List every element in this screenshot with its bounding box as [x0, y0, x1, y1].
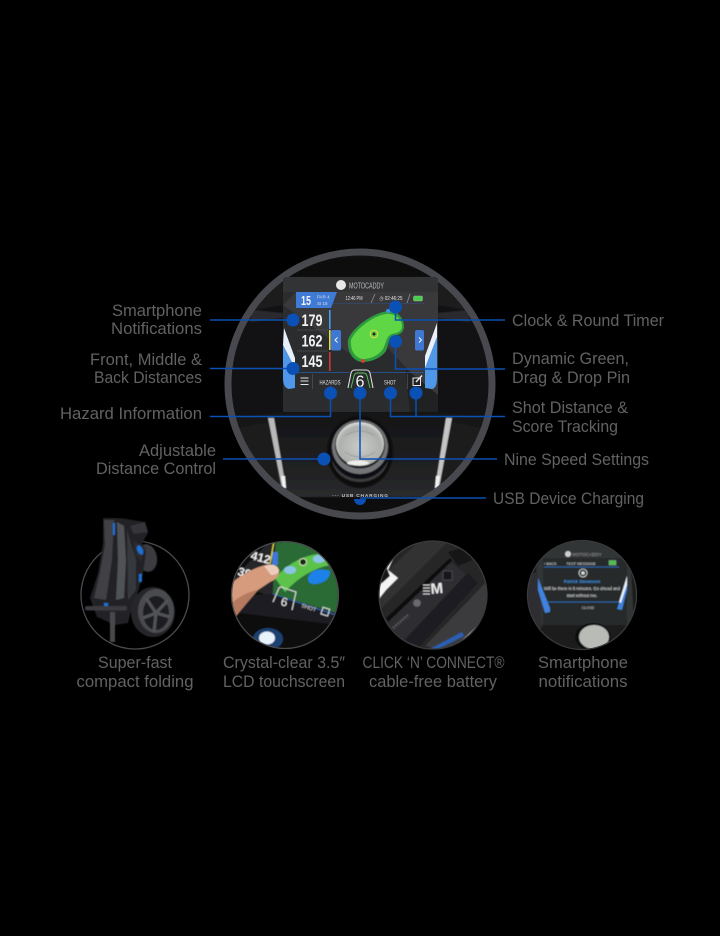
- feature: smartphone notifications: Will be there in 5 minutes. Go ahead and: [544, 586, 621, 591]
- right callout labels: USB Device Charging: [493, 490, 644, 508]
- console body: [267, 417, 453, 498]
- status bar: 12:46 PM: [346, 296, 363, 302]
- USB charging print: ◦◦◦ USB CHARGING: [332, 493, 388, 499]
- display bezel and screen: SI 18: [317, 301, 328, 306]
- left callout labels: Smartphone: [112, 302, 202, 320]
- left callout labels: Distance Control: [96, 460, 216, 478]
- golf green: [348, 309, 404, 363]
- distance numbers: 162: [302, 332, 322, 350]
- bottom menu: HAZARDS: [320, 380, 341, 386]
- feature captions: CLICK ‘N’ CONNECT®: [362, 654, 504, 672]
- feature: click n connect battery: M: [430, 580, 444, 598]
- hole badge: [296, 292, 337, 308]
- folded frame: [90, 518, 148, 625]
- feature: touchscreen: 39: [236, 564, 253, 581]
- feature: click n connect battery: [378, 540, 488, 650]
- feature captions: Crystal-clear 3.5″: [223, 654, 345, 672]
- left callout labels: Front, Middle &: [90, 351, 202, 369]
- distance numbers: [297, 310, 331, 371]
- brand logo: MOTOCADDY: [349, 280, 384, 290]
- feature: smartphone notifications: Patrick Stevenson: [564, 579, 601, 584]
- right callout labels: Nine Speed Settings: [504, 451, 649, 469]
- left callout labels: Hazard Information: [60, 405, 202, 423]
- right callout labels: Score Tracking: [512, 418, 618, 436]
- feature: smartphone notifications: ‹ BACK: [544, 562, 557, 566]
- side blue accents: [283, 345, 295, 389]
- right callout labels: Drag & Drop Pin: [512, 369, 630, 387]
- brand logo: [336, 280, 384, 290]
- screen diagonal shading: [283, 353, 438, 412]
- display bezel and screen: [283, 277, 438, 412]
- left callout labels: Adjustable: [139, 442, 216, 460]
- right callout labels: Shot Distance &: [512, 399, 628, 417]
- main console circle: [225, 252, 495, 520]
- display bezel and screen: 15: [301, 293, 311, 308]
- feature: touchscreen: SHOT: [300, 603, 317, 614]
- left callout labels: Back Distances: [94, 369, 202, 387]
- feature captions: compact folding: [76, 673, 194, 691]
- bottom menu: [296, 370, 424, 391]
- left callout labels: [60, 302, 216, 478]
- feature captions: LCD touchscreen: [223, 673, 345, 691]
- feature captions: [76, 654, 628, 691]
- small rear wheel: [135, 542, 159, 574]
- display bezel and screen: ◷ 02:46:25: [380, 296, 402, 302]
- feature: smartphone notifications: [527, 540, 637, 651]
- feature captions: notifications: [538, 673, 628, 691]
- left and right arrows: [331, 330, 341, 350]
- feature captions: Smartphone: [538, 654, 628, 672]
- display bezel and screen: PAR 4: [317, 294, 330, 300]
- right callout labels: [493, 312, 664, 508]
- feature: folding trolley: [81, 518, 189, 649]
- feature: smartphone notifications: TEXT MESSAGE: [566, 562, 596, 566]
- main wheel: [131, 587, 175, 637]
- feature captions: Super-fast: [98, 654, 172, 672]
- feature: smartphone notifications: CLOSE: [582, 606, 595, 610]
- callout lines and dots: [210, 300, 505, 505]
- speed control dial: [327, 416, 393, 488]
- chrome trim: [268, 418, 286, 488]
- bottom menu: 6: [356, 372, 364, 391]
- feature: smartphone notifications: MOTOCADDY: [572, 552, 602, 557]
- bottom menu: SHOT: [384, 380, 396, 386]
- handle bar: [85, 606, 127, 610]
- distance numbers: 179: [302, 311, 322, 330]
- feature: touchscreen: 6: [279, 594, 290, 610]
- feature: smartphone notifications: start without me.: [567, 593, 597, 598]
- feature: touchscreen: [228, 540, 342, 650]
- feature captions: cable-free battery: [369, 673, 498, 691]
- distance numbers: 145: [302, 352, 322, 371]
- left callout labels: Notifications: [111, 320, 202, 338]
- right callout labels: Dynamic Green,: [512, 350, 629, 368]
- right callout labels: Clock & Round Timer: [512, 312, 664, 330]
- feature: touchscreen: 412: [249, 548, 273, 567]
